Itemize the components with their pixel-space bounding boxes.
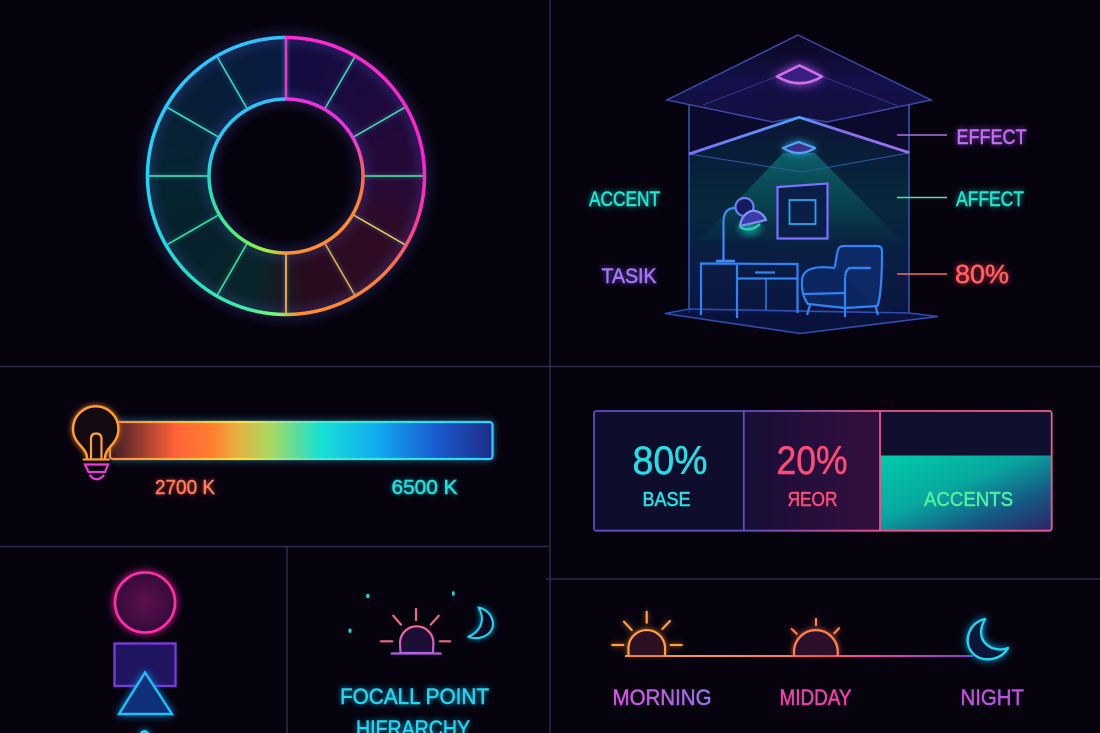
- icon: stars: [348, 591, 455, 633]
- spectrum gradient bar: [110, 422, 492, 459]
- cell: accents top: [880, 411, 1052, 456]
- floor: [665, 309, 938, 334]
- leader: effect: [897, 134, 947, 136]
- cell: rear: [744, 411, 880, 530]
- label: task: TASIK: [602, 265, 656, 288]
- ceiling light lower: [783, 142, 815, 153]
- label: rear: ЯEOR: [788, 489, 838, 511]
- colour temperature bar: [73, 406, 492, 479]
- label: 2700 K: 2700 K: [155, 477, 216, 499]
- icon: small moon: [468, 608, 493, 638]
- icon: morning sun: [612, 612, 682, 655]
- cell: base: [594, 411, 744, 530]
- armchair: [802, 246, 882, 317]
- label: accent: ACCENT: [589, 188, 660, 211]
- panel: 80/20 ratio box: [594, 411, 1052, 531]
- timeline line: [625, 655, 973, 657]
- wheel rings: [138, 28, 434, 324]
- ratio box borders: [594, 411, 1052, 531]
- panel: layered lighting house: [665, 35, 938, 334]
- upper wall: [689, 107, 799, 154]
- icon: midday sun: [792, 619, 839, 655]
- label: midday: MIDDAY: [780, 685, 852, 710]
- house room body: [689, 117, 909, 313]
- icon: rectangle: [114, 644, 176, 686]
- ceiling light top: [777, 66, 822, 83]
- desk: [701, 264, 798, 318]
- wall art frame: [778, 184, 828, 238]
- colour wheel: [138, 28, 434, 324]
- label: effect: EFFECT: [956, 126, 1027, 149]
- value: 20 percent: 20%: [776, 439, 848, 483]
- label: affect: AFFECT: [956, 188, 1024, 211]
- cell: accents fill: [880, 456, 1052, 530]
- label: 6500 K: 6500 K: [392, 477, 458, 499]
- label: accents: ACCENTS: [924, 489, 1013, 511]
- leader: 80 percent: [897, 273, 947, 275]
- icon: triangle: [119, 672, 172, 714]
- icon: small sun: [381, 609, 450, 654]
- desk lamp: [716, 198, 766, 261]
- icon: light bulb: [73, 406, 118, 479]
- wheel sector fill: [149, 39, 423, 313]
- icon: circle: [115, 572, 175, 632]
- value: 80 percent: 80%: [632, 439, 708, 483]
- panel: daylight timeline: [612, 612, 1024, 710]
- wheel spokes: [149, 39, 423, 313]
- icon: night moon: [968, 619, 1008, 659]
- icon: small circle: [140, 730, 150, 733]
- light cone: [700, 153, 905, 245]
- thick ceiling beam: [689, 117, 909, 154]
- label: base: BASE: [642, 489, 690, 511]
- leader: affect: [897, 196, 947, 198]
- label: 80 percent: 80%: [955, 259, 1009, 289]
- label: morning: MORNING: [612, 685, 712, 710]
- label: night: NIGHT: [960, 685, 1024, 710]
- panel: geometric shapes: [114, 572, 176, 733]
- inner ceiling: [689, 153, 909, 172]
- panel: focal point: [340, 591, 493, 733]
- heading: focal point: FOCALL POINT: [340, 684, 489, 709]
- roof: [667, 35, 931, 313]
